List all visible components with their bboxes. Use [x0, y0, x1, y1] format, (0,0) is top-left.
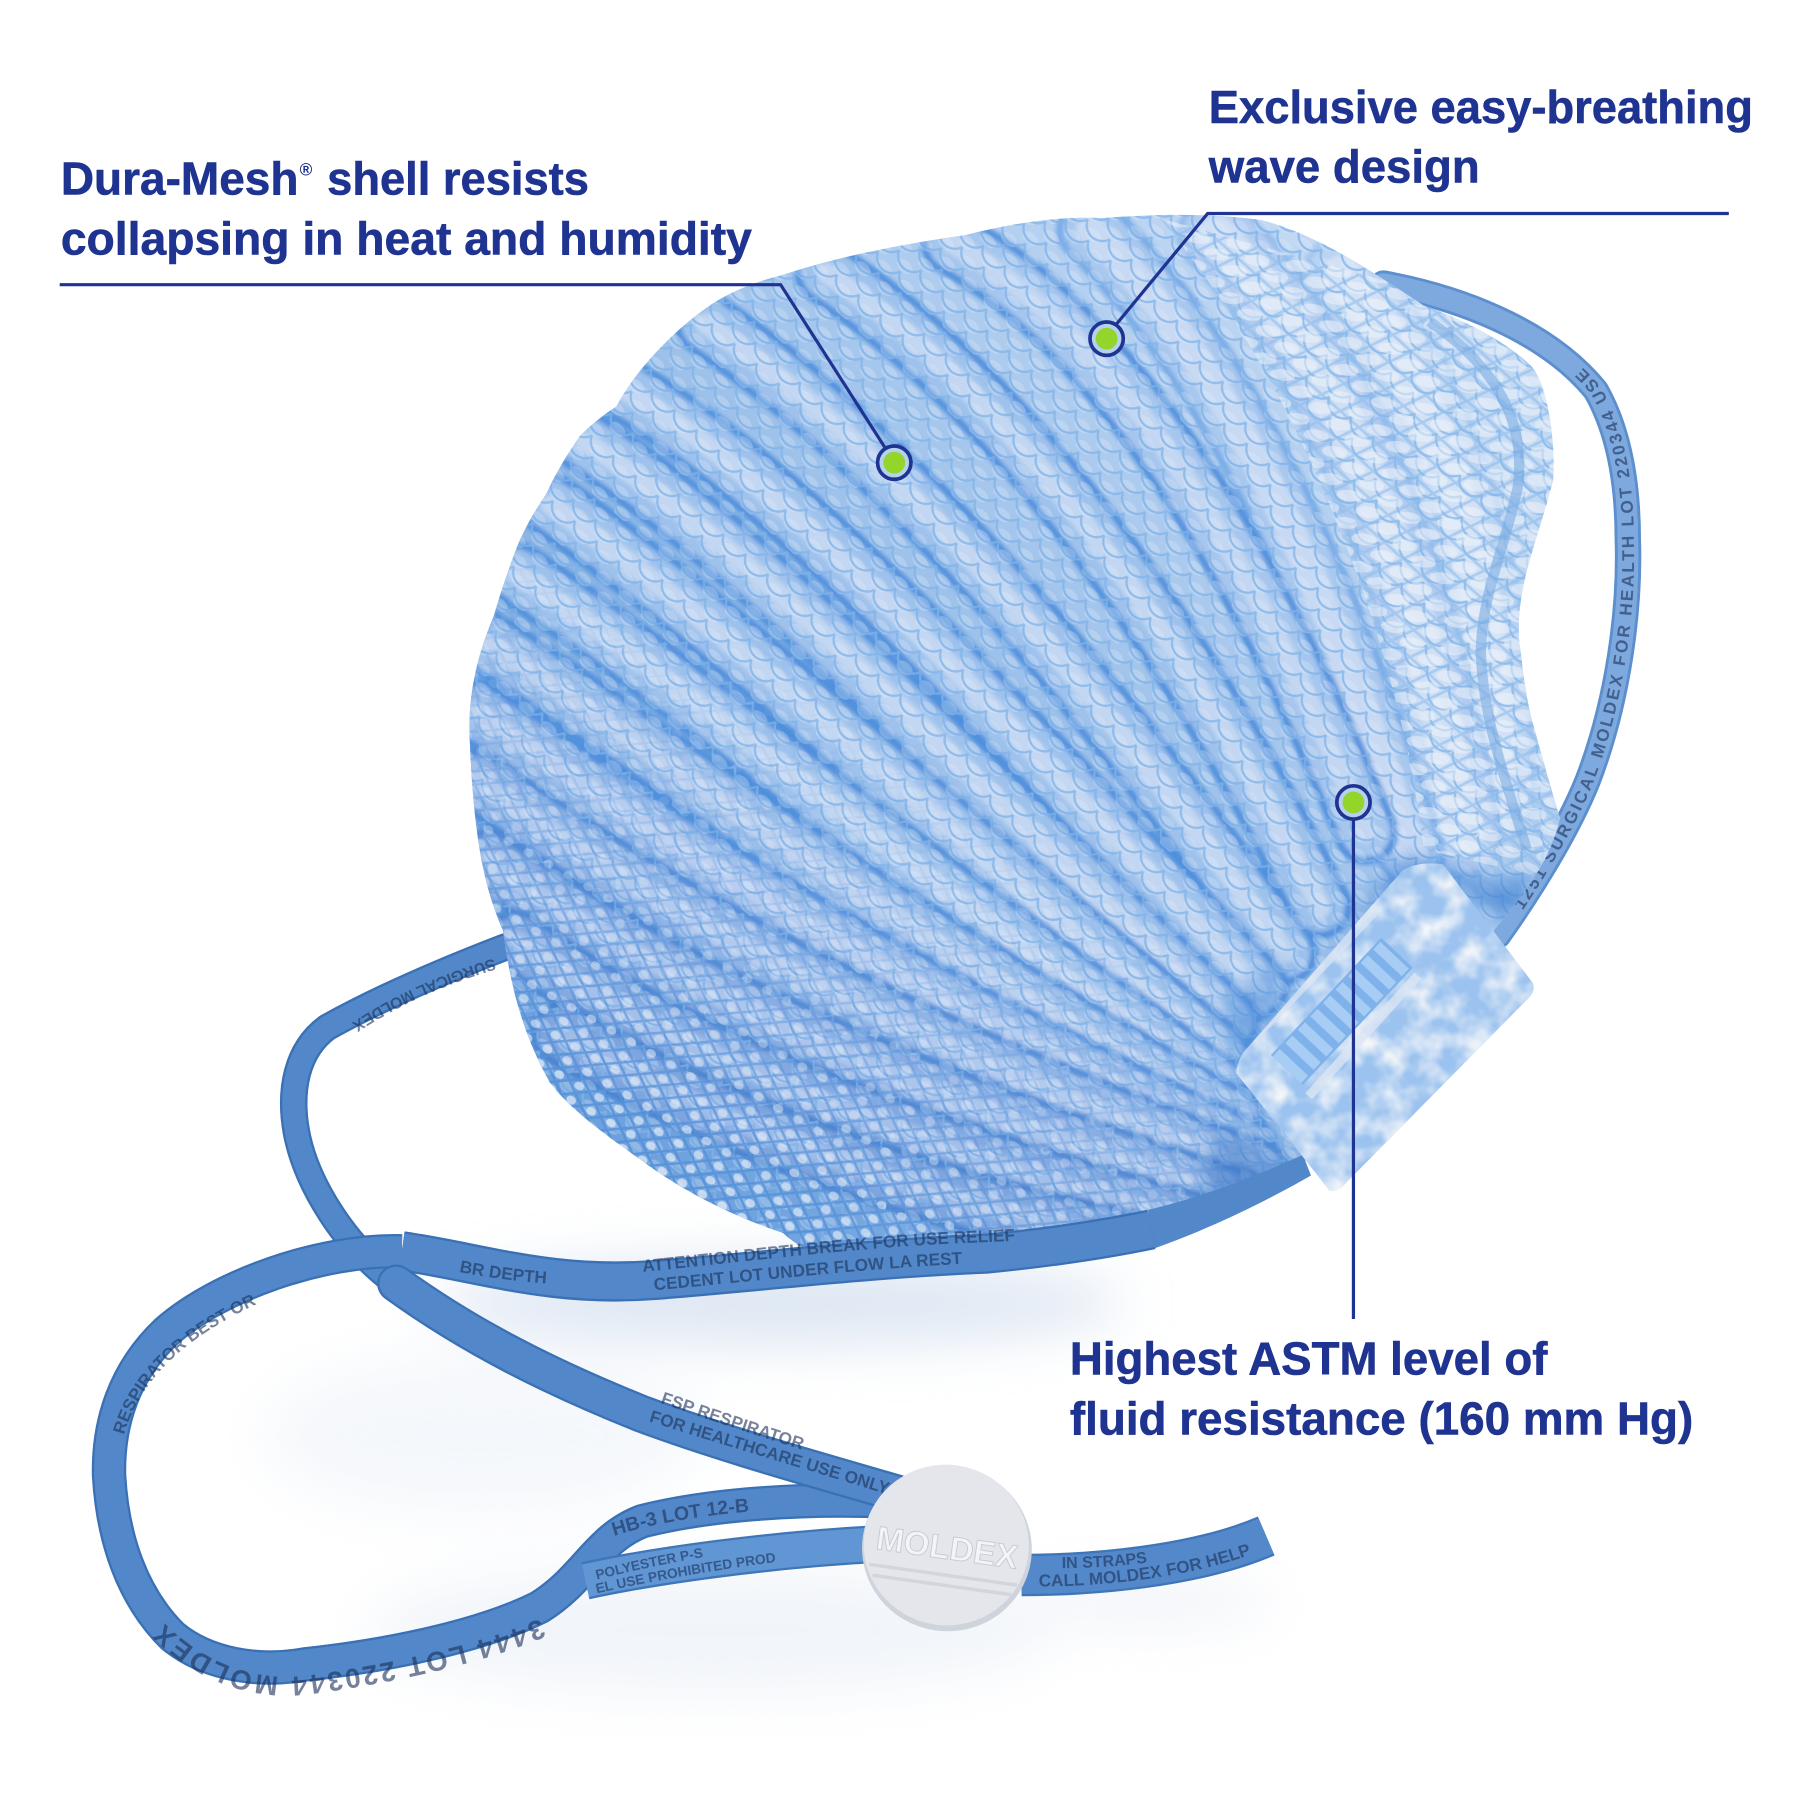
clip pale band beside strip — [1309, 976, 1418, 1096]
callout text: wave design — [1208, 81, 1753, 193]
callout text: wave design: wave design — [1208, 141, 1480, 193]
adjuster button: MOLDEX — [874, 1520, 1020, 1577]
strap: folded end: EL USE PROHIBITED PROD — [596, 1553, 775, 1593]
strap: lower long loop and edge along mask: RESPIRATOR BEST OR — [113, 1295, 256, 1434]
strap: free tail: CALL MOLDEX FOR HELP — [1039, 1544, 1248, 1587]
strap: right side behind mask: 1251 SURGICAL MOLDEX FOR HEALTH LOT 220344 USE — [1515, 368, 1634, 910]
strap: lower long loop and edge along mask: ATTENTION DEPTH BREAK FOR USE RELIEF — [643, 1228, 1014, 1272]
callout text: Dura-Mesh shell: collapsing in heat and humidity — [61, 212, 752, 264]
strap crossing over lower loop: FOR HEALTHCARE USE ONLY — [650, 1410, 890, 1493]
clip ribbed strip — [1287, 953, 1397, 1070]
strap crossing over lower loop — [377, 1264, 904, 1506]
strap crossing over lower loop: FSP RESPIRATOR — [661, 1392, 804, 1450]
callout text: fluid resistance: fluid resistance (160 mm Hg) — [1070, 1392, 1693, 1444]
callout text: Dura-Mesh shell: Dura-Mesh — [61, 153, 298, 205]
mesh texture — [470, 214, 1558, 1246]
strap: lower long loop and edge along mask: BR DEPTH — [460, 1260, 546, 1284]
leader line: Dura-Mesh shell — [60, 285, 885, 448]
callout text: Dura-Mesh shell: ® — [300, 160, 313, 180]
inner flange band on right edge — [1429, 321, 1527, 849]
strap: lower long loop and edge along mask: HB-3 LOT 12-B — [612, 1498, 748, 1536]
strap: free tail — [1012, 1496, 1274, 1596]
mask shell — [469, 214, 1560, 1247]
shading around the nose clip — [1194, 855, 1538, 1228]
ground shadow — [264, 1262, 1274, 1693]
strap: lower long loop and edge along mask — [92, 1198, 1192, 1696]
nose clip — [1236, 863, 1534, 1191]
strap: right side behind mask — [1374, 270, 1642, 947]
callout text: fluid resistance — [1070, 1333, 1693, 1444]
strap: lower long loop and edge along mask: 3444 LOT 220344 MOLDEX — [152, 1620, 545, 1696]
callout text: Dura-Mesh shell: shell resists — [327, 153, 589, 205]
callout text: fluid resistance: Highest ASTM level of — [1070, 1333, 1548, 1385]
strap: free tail: IN STRAPS — [1062, 1552, 1146, 1568]
pleated ribs — [476, 230, 1494, 1240]
open mesh on nose side — [1159, 218, 1573, 884]
strap: lower long loop and edge along mask: CEDENT LOT UNDER FLOW LA REST — [654, 1252, 962, 1290]
marker dot: wave design — [1090, 322, 1123, 355]
strap: folded end — [582, 1526, 866, 1600]
callout text: Dura-Mesh shell — [61, 153, 752, 264]
strap: mask rim tapering into the nose clip — [1148, 1155, 1311, 1249]
strap: upper loop — [280, 933, 508, 1286]
strap: folded end: POLYESTER P-S — [596, 1548, 702, 1580]
marker dot: Dura-Mesh shell — [878, 446, 911, 479]
marker dot: fluid resistance — [1337, 786, 1370, 819]
clip mottled white texture — [1236, 864, 1534, 1191]
adjuster button — [851, 1454, 1043, 1642]
strap: upper loop: SURGICAL MOLDEX — [352, 960, 496, 1032]
leader line: wave design — [1116, 214, 1729, 325]
leader line: fluid resistance — [1352, 818, 1355, 1319]
dense lower mesh — [470, 575, 1302, 1246]
callout text: wave design: Exclusive easy-breathing — [1209, 81, 1753, 133]
